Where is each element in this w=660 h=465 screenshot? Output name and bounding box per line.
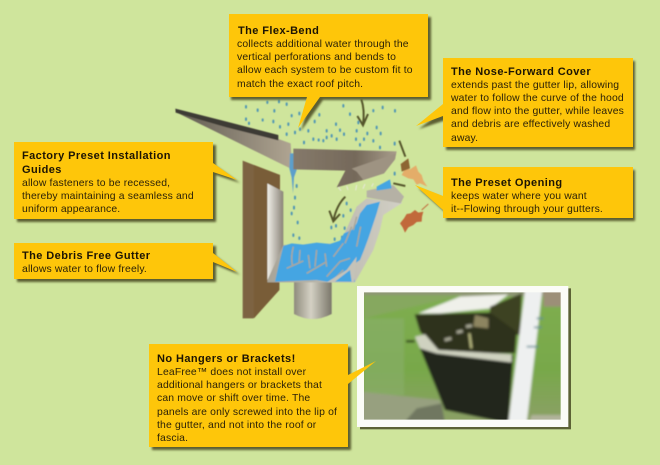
callout: The Nose-Forward Cover	[416, 58, 635, 150]
body text: LeaFree™ does not install over	[157, 367, 307, 378]
heading: The Preset Opening	[451, 177, 562, 189]
heading: No Hangers or Brackets!	[157, 353, 296, 365]
callout: The Nose-Forward Cover: away.	[451, 133, 478, 144]
callout: Factory Preset Installation Guides: Guides	[22, 164, 62, 176]
callout: The Flex-Bend: match the exact roof pitch.	[237, 79, 363, 90]
downspout	[294, 282, 332, 319]
back panel	[267, 183, 283, 281]
body text: allow fasteners to be recessed,	[22, 178, 170, 189]
callout: No Hangers or Brackets: the gutter, and not into the roof or	[157, 420, 317, 431]
photo frame	[357, 286, 568, 427]
callout: The Nose-Forward Cover: water to follow the curve of the hood	[450, 93, 624, 104]
flex-bend water stream	[289, 153, 297, 193]
photo	[357, 286, 571, 429]
gutter diagram	[175, 99, 428, 319]
fascia board	[243, 161, 280, 318]
callout: Factory Preset Installation Guides: uniform appearance.	[22, 204, 120, 215]
photo image	[364, 292, 561, 420]
callout: The Flex-Bend: vertical perforations and bends to	[237, 52, 396, 63]
roof	[175, 109, 292, 169]
callout: No Hangers or Brackets: panels are only screwed into the lip of	[157, 407, 337, 418]
rain drops	[246, 101, 395, 240]
heading: The Debris Free Gutter	[22, 250, 151, 262]
callout: The Debris Free Gutter	[14, 243, 240, 282]
callout: No Hangers or Brackets	[149, 344, 376, 450]
arrows and debris	[329, 99, 405, 221]
callout: Factory Preset Installation Guides	[14, 142, 240, 222]
body text: extends past the gutter lip, allowing	[451, 80, 619, 91]
water	[275, 179, 392, 282]
callout: No Hangers or Brackets: additional hangers or brackets that	[157, 380, 322, 391]
gutter body	[267, 185, 404, 282]
callout: The Preset Opening	[415, 167, 635, 221]
heading: The Nose-Forward Cover	[451, 66, 591, 78]
callout: The Flex-Bend: allow each system to be custom fit to	[237, 65, 413, 76]
callout: No Hangers or Brackets: fascia.	[157, 433, 188, 444]
body text: keeps water where you want	[451, 191, 587, 202]
leaf: brown stem	[401, 158, 410, 172]
body text: collects additional water through the	[237, 39, 409, 50]
photo shadow	[360, 288, 571, 429]
callout: The Flex-Bend	[229, 14, 431, 131]
heading: Factory Preset Installation	[22, 150, 171, 162]
heading: The Flex-Bend	[238, 25, 319, 37]
leaf: tan	[402, 165, 427, 187]
callout: No Hangers or Brackets: can move or shift over time. The	[157, 393, 310, 404]
callout: Factory Preset Installation Guides: thereby maintaining a seamless and	[22, 191, 194, 202]
callout: The Preset Opening: it--Flowing through your gutters.	[451, 204, 603, 215]
body text: allows water to flow freely.	[22, 264, 147, 275]
callout: The Nose-Forward Cover: and flow into the gutter, while leaves	[451, 106, 624, 117]
hood cover	[293, 149, 397, 191]
leaf: orange	[400, 204, 428, 233]
callout: The Nose-Forward Cover: and debris are effectively washed	[451, 119, 610, 130]
